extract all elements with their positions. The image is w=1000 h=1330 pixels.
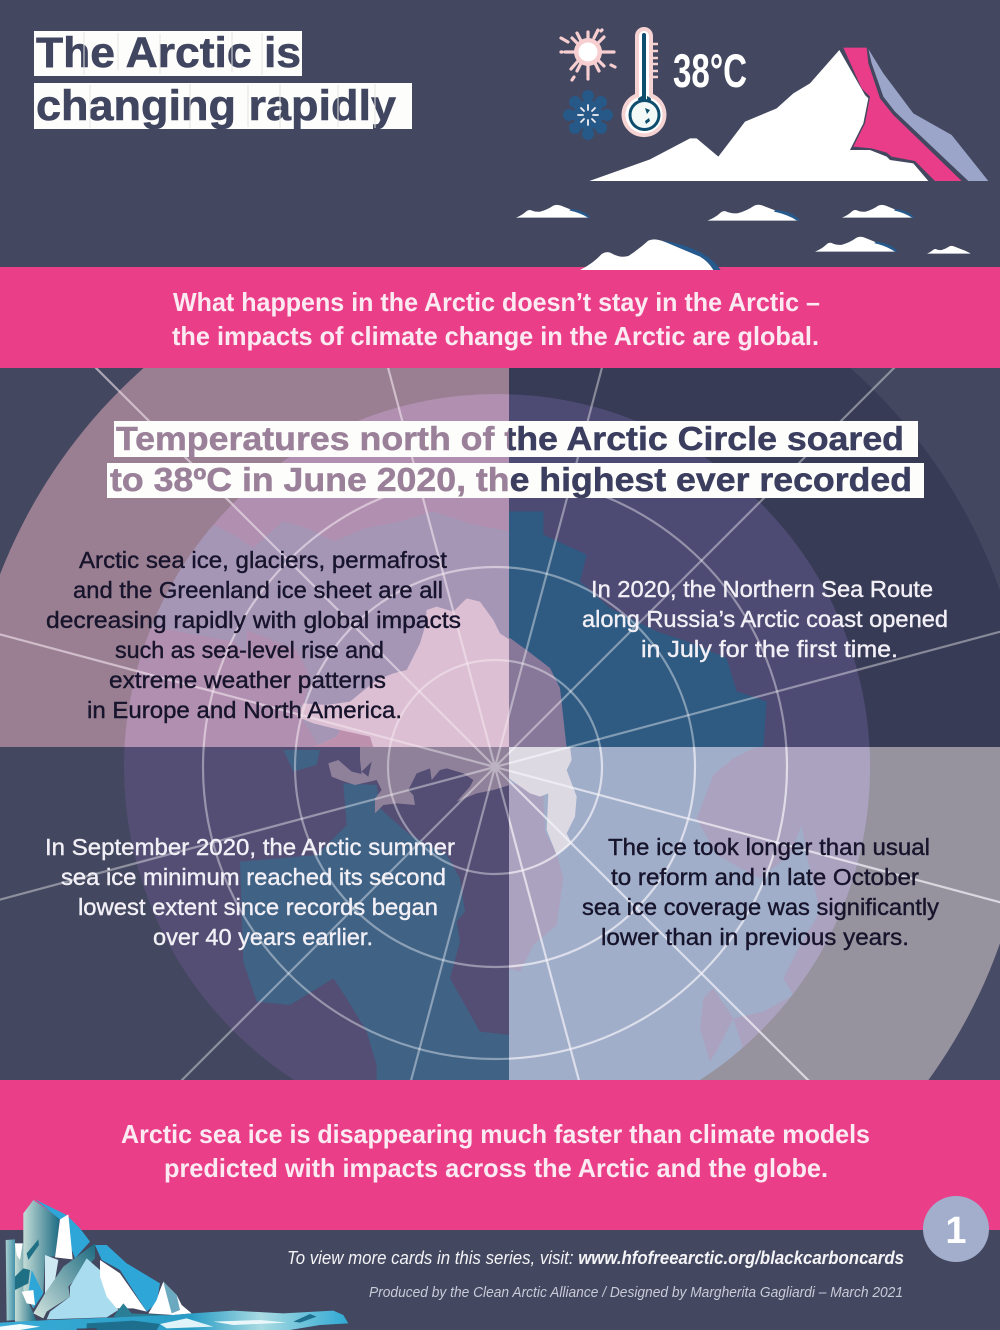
panel: top-right quadrant — [509, 368, 1000, 747]
text block: glaciers and ice sheet: Arctic sea ice, glaciers, permafrost — [79, 547, 448, 573]
illustration: ice floes — [516, 205, 971, 270]
text block: ice reforming: The ice took longer than usual — [608, 834, 930, 860]
icon: snowflake — [563, 90, 613, 140]
title: The Arctic is — [36, 29, 301, 77]
heading: temperatures: Temperatures north of the Arctic Circle soared — [116, 420, 904, 457]
text block: ice reforming: lower than in previous years. — [601, 924, 909, 950]
text block: northern sea route: In 2020, the Northern Sea Route — [591, 576, 933, 602]
panel: bottom-right quadrant — [509, 747, 1000, 1080]
page number badge: 1 — [945, 1210, 967, 1252]
panel: bottom-left quadrant — [0, 747, 509, 1080]
text block: glaciers and ice sheet: decreasing rapidly with global impacts — [46, 607, 461, 633]
text block: summer sea ice minimum: sea ice minimum reached its second — [61, 864, 446, 890]
text block: summer sea ice minimum: lowest extent since records began — [78, 894, 438, 920]
title — [34, 29, 412, 130]
heading: temperatures: to 38ºC in June 2020, the highest ever recorded — [110, 461, 912, 498]
text block: summer sea ice minimum — [45, 834, 455, 950]
text block: northern sea route: along Russia’s Arctic coast opened — [582, 606, 948, 632]
pink band bottom: predicted with impacts across the Arctic and the globe. — [164, 1153, 828, 1183]
illustration: pink band top — [0, 267, 1000, 368]
pink band bottom: Arctic sea ice is disappearing much faster than climate models — [121, 1119, 870, 1149]
illustration: mountain — [589, 48, 988, 181]
text block: ice reforming — [582, 834, 940, 950]
text block: glaciers and ice sheet: in Europe and North America. — [87, 697, 402, 723]
text block: glaciers and ice sheet: such as sea-level rise and — [115, 637, 384, 663]
text block: northern sea route — [582, 576, 948, 662]
illustration: iceberg — [0, 1199, 348, 1330]
text block: ice reforming: to reform and in late October — [611, 864, 919, 890]
top banner text: What happens in the Arctic doesn’t stay in the Arctic – — [173, 287, 820, 317]
panel: polar map quadrants — [0, 368, 1000, 1270]
text block: glaciers and ice sheet: extreme weather patterns — [109, 667, 386, 693]
text block: summer sea ice minimum: In September 2020, the Arctic summer — [45, 834, 455, 860]
heading: temperatures — [107, 420, 924, 498]
text block: glaciers and ice sheet: and the Greenland ice sheet are all — [73, 577, 443, 603]
title: changing rapidly — [36, 82, 396, 130]
footer: website link: To view more cards in this series, visit: www.hfofreearctic.org/blackcarboncards — [287, 1248, 904, 1268]
top banner text: the impacts of climate change in the Arctic are global. — [172, 321, 819, 351]
icon: thermometer — [622, 27, 666, 137]
pink band bottom — [0, 1080, 1000, 1230]
text block: glaciers and ice sheet — [46, 547, 461, 723]
temperature label: 38°C — [673, 44, 747, 97]
text block: ice reforming: sea ice coverage was significantly — [582, 894, 940, 920]
top banner text — [172, 287, 820, 351]
page number badge — [923, 1196, 989, 1262]
panel: top-left quadrant — [0, 368, 509, 747]
footer: credits: Produced by the Clean Arctic Alliance / Designed by Margherita Gagliardi – March 2021 — [369, 1284, 903, 1301]
text block: northern sea route: in July for the first time. — [641, 636, 898, 662]
text block: summer sea ice minimum: over 40 years earlier. — [153, 924, 373, 950]
icon: sun — [561, 30, 615, 80]
